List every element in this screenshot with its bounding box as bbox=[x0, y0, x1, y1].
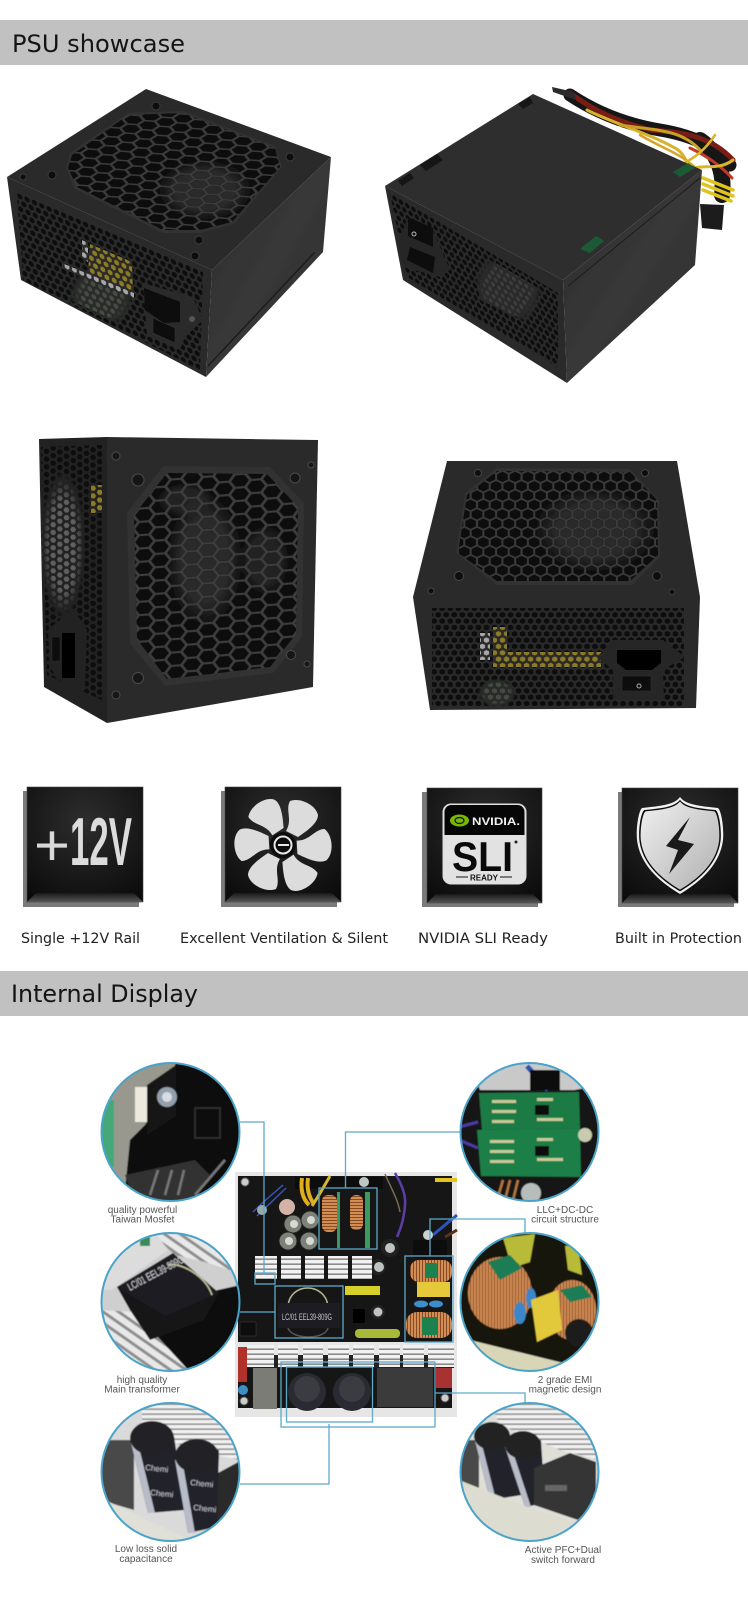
detail circle: Low loss solid capacitance: Chemi bbox=[150, 1488, 174, 1499]
photo: PSU side view with large fan grill bbox=[39, 437, 318, 723]
icon: NVIDIA SLI Ready badge bbox=[422, 788, 542, 907]
photo: PSU angled with fan on top bbox=[7, 89, 331, 377]
label: quality powerful Taiwan Mosfet: Taiwan Mosfet bbox=[111, 1214, 175, 1226]
connector lines: callouts to board regions bbox=[240, 1122, 525, 1484]
label: LLC+DC-DC circuit structure: circuit structure bbox=[531, 1214, 599, 1226]
caption: Built in Protection: Built in Protection bbox=[615, 931, 742, 947]
label: Active PFC+Dual switch forward: switch forward bbox=[531, 1555, 595, 1566]
detail circle: Main transformer bbox=[100, 1232, 245, 1372]
photo: PSU rear view with fan above and mesh panel bbox=[413, 461, 700, 710]
label: quality powerful Taiwan Mosfet: quality powerful bbox=[108, 1205, 177, 1216]
section header: PSU showcase bbox=[0, 20, 748, 65]
detail circle: Low loss solid capacitance: Chemi bbox=[193, 1503, 217, 1514]
label: 2 grade EMI magnetic design: 2 grade EMI bbox=[538, 1375, 592, 1386]
caption: Single +12V Rail: Single +12V Rail bbox=[21, 931, 140, 947]
icon: fan ventilation bbox=[221, 787, 341, 907]
label: 2 grade EMI magnetic design: magnetic design bbox=[529, 1384, 601, 1396]
icon: +12V single rail: + bbox=[34, 813, 70, 878]
label: high quality Main transformer: Main transformer bbox=[104, 1384, 180, 1396]
label: Active PFC+Dual switch forward: Active PFC+Dual bbox=[525, 1545, 601, 1556]
icon: +12V single rail: 12V bbox=[70, 804, 132, 880]
section header: Internal Display: Internal Display bbox=[11, 980, 198, 1008]
circuit board photo bbox=[235, 1172, 457, 1417]
circuit board photo: LC/01 EEL39-809G bbox=[282, 1312, 332, 1322]
icon: NVIDIA SLI Ready badge: READY bbox=[470, 874, 499, 882]
section header: Internal Display bbox=[0, 971, 748, 1016]
label: Low loss solid capacitance: capacitance bbox=[119, 1554, 173, 1565]
label: high quality Main transformer: high quality bbox=[117, 1375, 167, 1386]
label: Low loss solid capacitance: Low loss solid bbox=[115, 1544, 177, 1555]
caption: Excellent Ventilation & Silent: Excellent Ventilation & Silent bbox=[180, 931, 388, 947]
icon: +12V single rail bbox=[23, 787, 143, 907]
detail circle: Low loss solid capacitance: Chemi bbox=[145, 1463, 169, 1474]
detail circle: LLC+DC-DC structure bbox=[459, 1062, 601, 1203]
label: LLC+DC-DC circuit structure: LLC+DC-DC bbox=[537, 1205, 593, 1216]
detail circle: Low loss solid capacitance bbox=[100, 1402, 242, 1542]
detail circle: Active PFC + dual switch forward bbox=[459, 1402, 601, 1542]
detail circle: Low loss solid capacitance: Chemi bbox=[190, 1478, 214, 1489]
caption: NVIDIA SLI Ready: NVIDIA SLI Ready bbox=[418, 931, 548, 947]
detail circle: EMI magnetic design bbox=[459, 1232, 601, 1372]
photo: PSU angled with cables bbox=[385, 87, 733, 383]
detail circle: Taiwan Mosfet bbox=[100, 1062, 242, 1202]
icon: shield protection bbox=[618, 788, 738, 907]
icon: NVIDIA SLI Ready badge: NVIDIA. bbox=[472, 816, 520, 828]
detail circle: Main transformer: LC/01 EEL39-809G bbox=[126, 1254, 186, 1294]
icon: NVIDIA SLI Ready badge: SLI bbox=[452, 833, 513, 880]
section header: PSU showcase: PSU showcase bbox=[12, 30, 185, 58]
